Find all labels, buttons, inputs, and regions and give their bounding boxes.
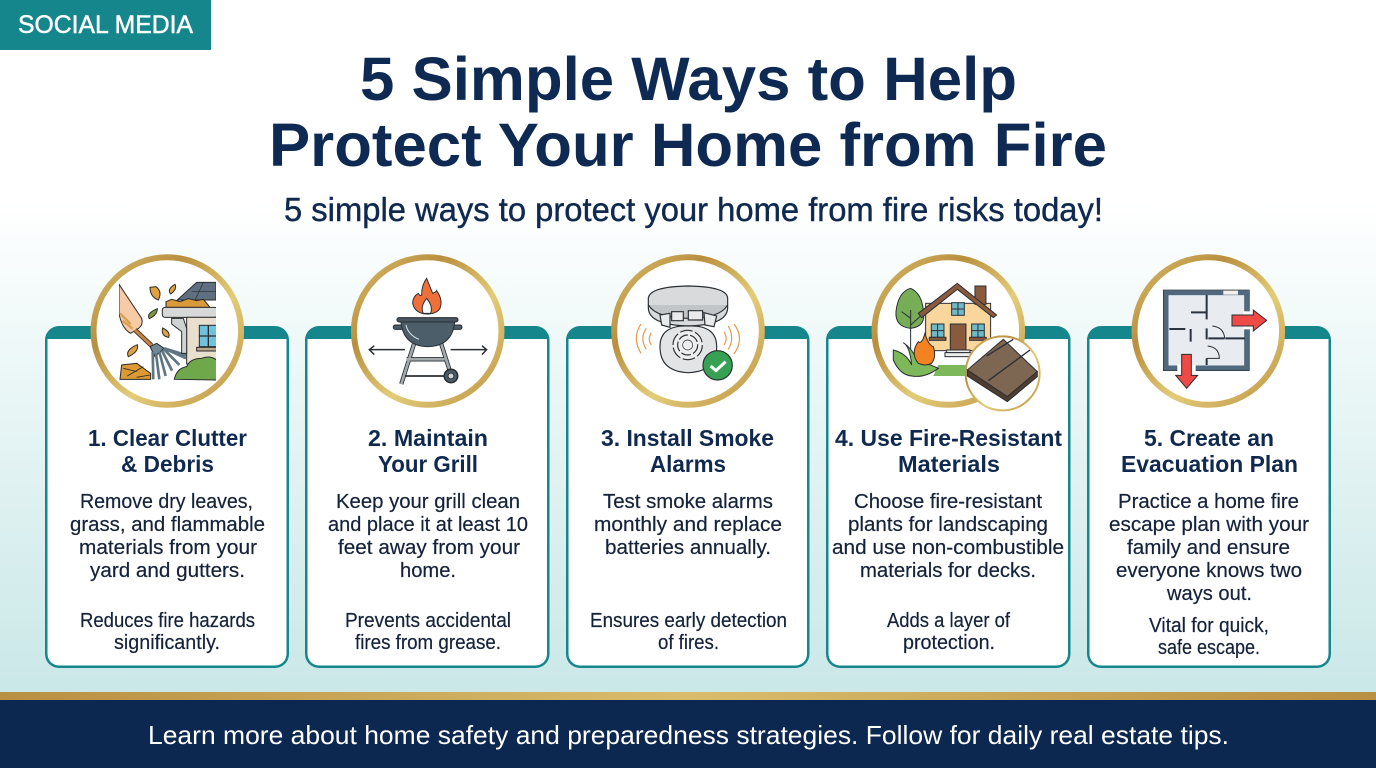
description: everyone knows two — [1116, 560, 1302, 582]
heading: & Debris — [121, 451, 214, 477]
description: feet away from your — [338, 537, 520, 559]
benefit: protection. — [903, 632, 995, 654]
heading: Alarms — [650, 451, 726, 477]
icon: floor plan — [1134, 257, 1282, 405]
icon: smoke alarm — [614, 257, 762, 405]
description — [594, 491, 782, 559]
description: and place it at least 10 — [328, 514, 528, 536]
heading — [88, 425, 247, 477]
description: materials for decks. — [860, 560, 1036, 582]
heading — [835, 425, 1062, 477]
description: monthly and replace — [594, 514, 782, 536]
benefit: Reduces fire hazards — [80, 610, 255, 632]
panel: smoke alarms — [566, 257, 810, 668]
benefit: fires from grease. — [355, 632, 501, 654]
panel: clear clutter — [45, 257, 289, 668]
description: home. — [400, 560, 456, 582]
footer text: Learn more about home safety and preparedness strategies. Follow for daily real estate tips. — [148, 720, 1229, 750]
benefit: significantly. — [114, 632, 220, 654]
description: yard and gutters. — [90, 560, 245, 582]
description: Remove dry leaves, — [80, 491, 253, 513]
panel: evacuation plan — [1087, 257, 1331, 668]
description: grass, and flammable — [70, 514, 265, 536]
icon: house and decking — [874, 257, 1040, 410]
description: Practice a home fire — [1118, 491, 1299, 513]
benefit: of fires. — [658, 632, 719, 654]
benefit — [345, 610, 511, 654]
benefit: Vital for quick, — [1149, 615, 1269, 637]
description: family and ensure — [1127, 537, 1290, 559]
heading: 2. Maintain — [368, 425, 488, 451]
heading — [1121, 425, 1298, 477]
benefit — [80, 610, 255, 654]
heading: Materials — [898, 451, 1000, 477]
heading — [368, 425, 488, 477]
description: Keep your grill clean — [336, 491, 520, 513]
description: and use non-combustible — [832, 537, 1064, 559]
icon: raking leaves — [94, 257, 241, 405]
benefit — [887, 610, 1010, 654]
benefit: safe escape. — [1158, 637, 1260, 659]
subtitle: 5 simple ways to protect your home from fire risks today! — [284, 191, 1103, 228]
benefit — [590, 610, 787, 654]
badge: social media: SOCIAL MEDIA — [18, 11, 193, 39]
heading: Evacuation Plan — [1121, 451, 1298, 477]
description — [328, 491, 528, 582]
title: 5 Simple Ways to Help — [360, 45, 1017, 113]
heading — [601, 425, 774, 477]
heading: 1. Clear Clutter — [88, 425, 247, 451]
title — [269, 45, 1107, 179]
benefit: Prevents accidental — [345, 610, 511, 632]
description: Test smoke alarms — [603, 491, 773, 513]
icon: grill — [354, 257, 502, 405]
description — [70, 491, 265, 582]
title: Protect Your Home from Fire — [269, 111, 1107, 179]
description: Choose fire-resistant — [854, 491, 1042, 513]
description: materials from your — [79, 537, 257, 559]
heading: 4. Use Fire-Resistant — [835, 425, 1062, 451]
heading: 3. Install Smoke — [601, 425, 774, 451]
heading: 5. Create an — [1144, 425, 1274, 451]
description: batteries annually. — [605, 537, 771, 559]
badge: social media — [0, 0, 211, 50]
description — [832, 491, 1064, 582]
benefit: Adds a layer of — [887, 610, 1010, 632]
description: plants for landscaping — [848, 514, 1048, 536]
heading: Your Grill — [378, 451, 478, 477]
benefit — [1149, 615, 1269, 659]
description: escape plan with your — [1109, 514, 1309, 536]
description: ways out. — [1166, 583, 1252, 605]
footer banner — [0, 692, 1376, 768]
panel: fire-resistant materials — [826, 257, 1070, 668]
panel: maintain grill — [305, 257, 550, 668]
description — [1109, 491, 1309, 605]
benefit: Ensures early detection — [590, 610, 787, 632]
